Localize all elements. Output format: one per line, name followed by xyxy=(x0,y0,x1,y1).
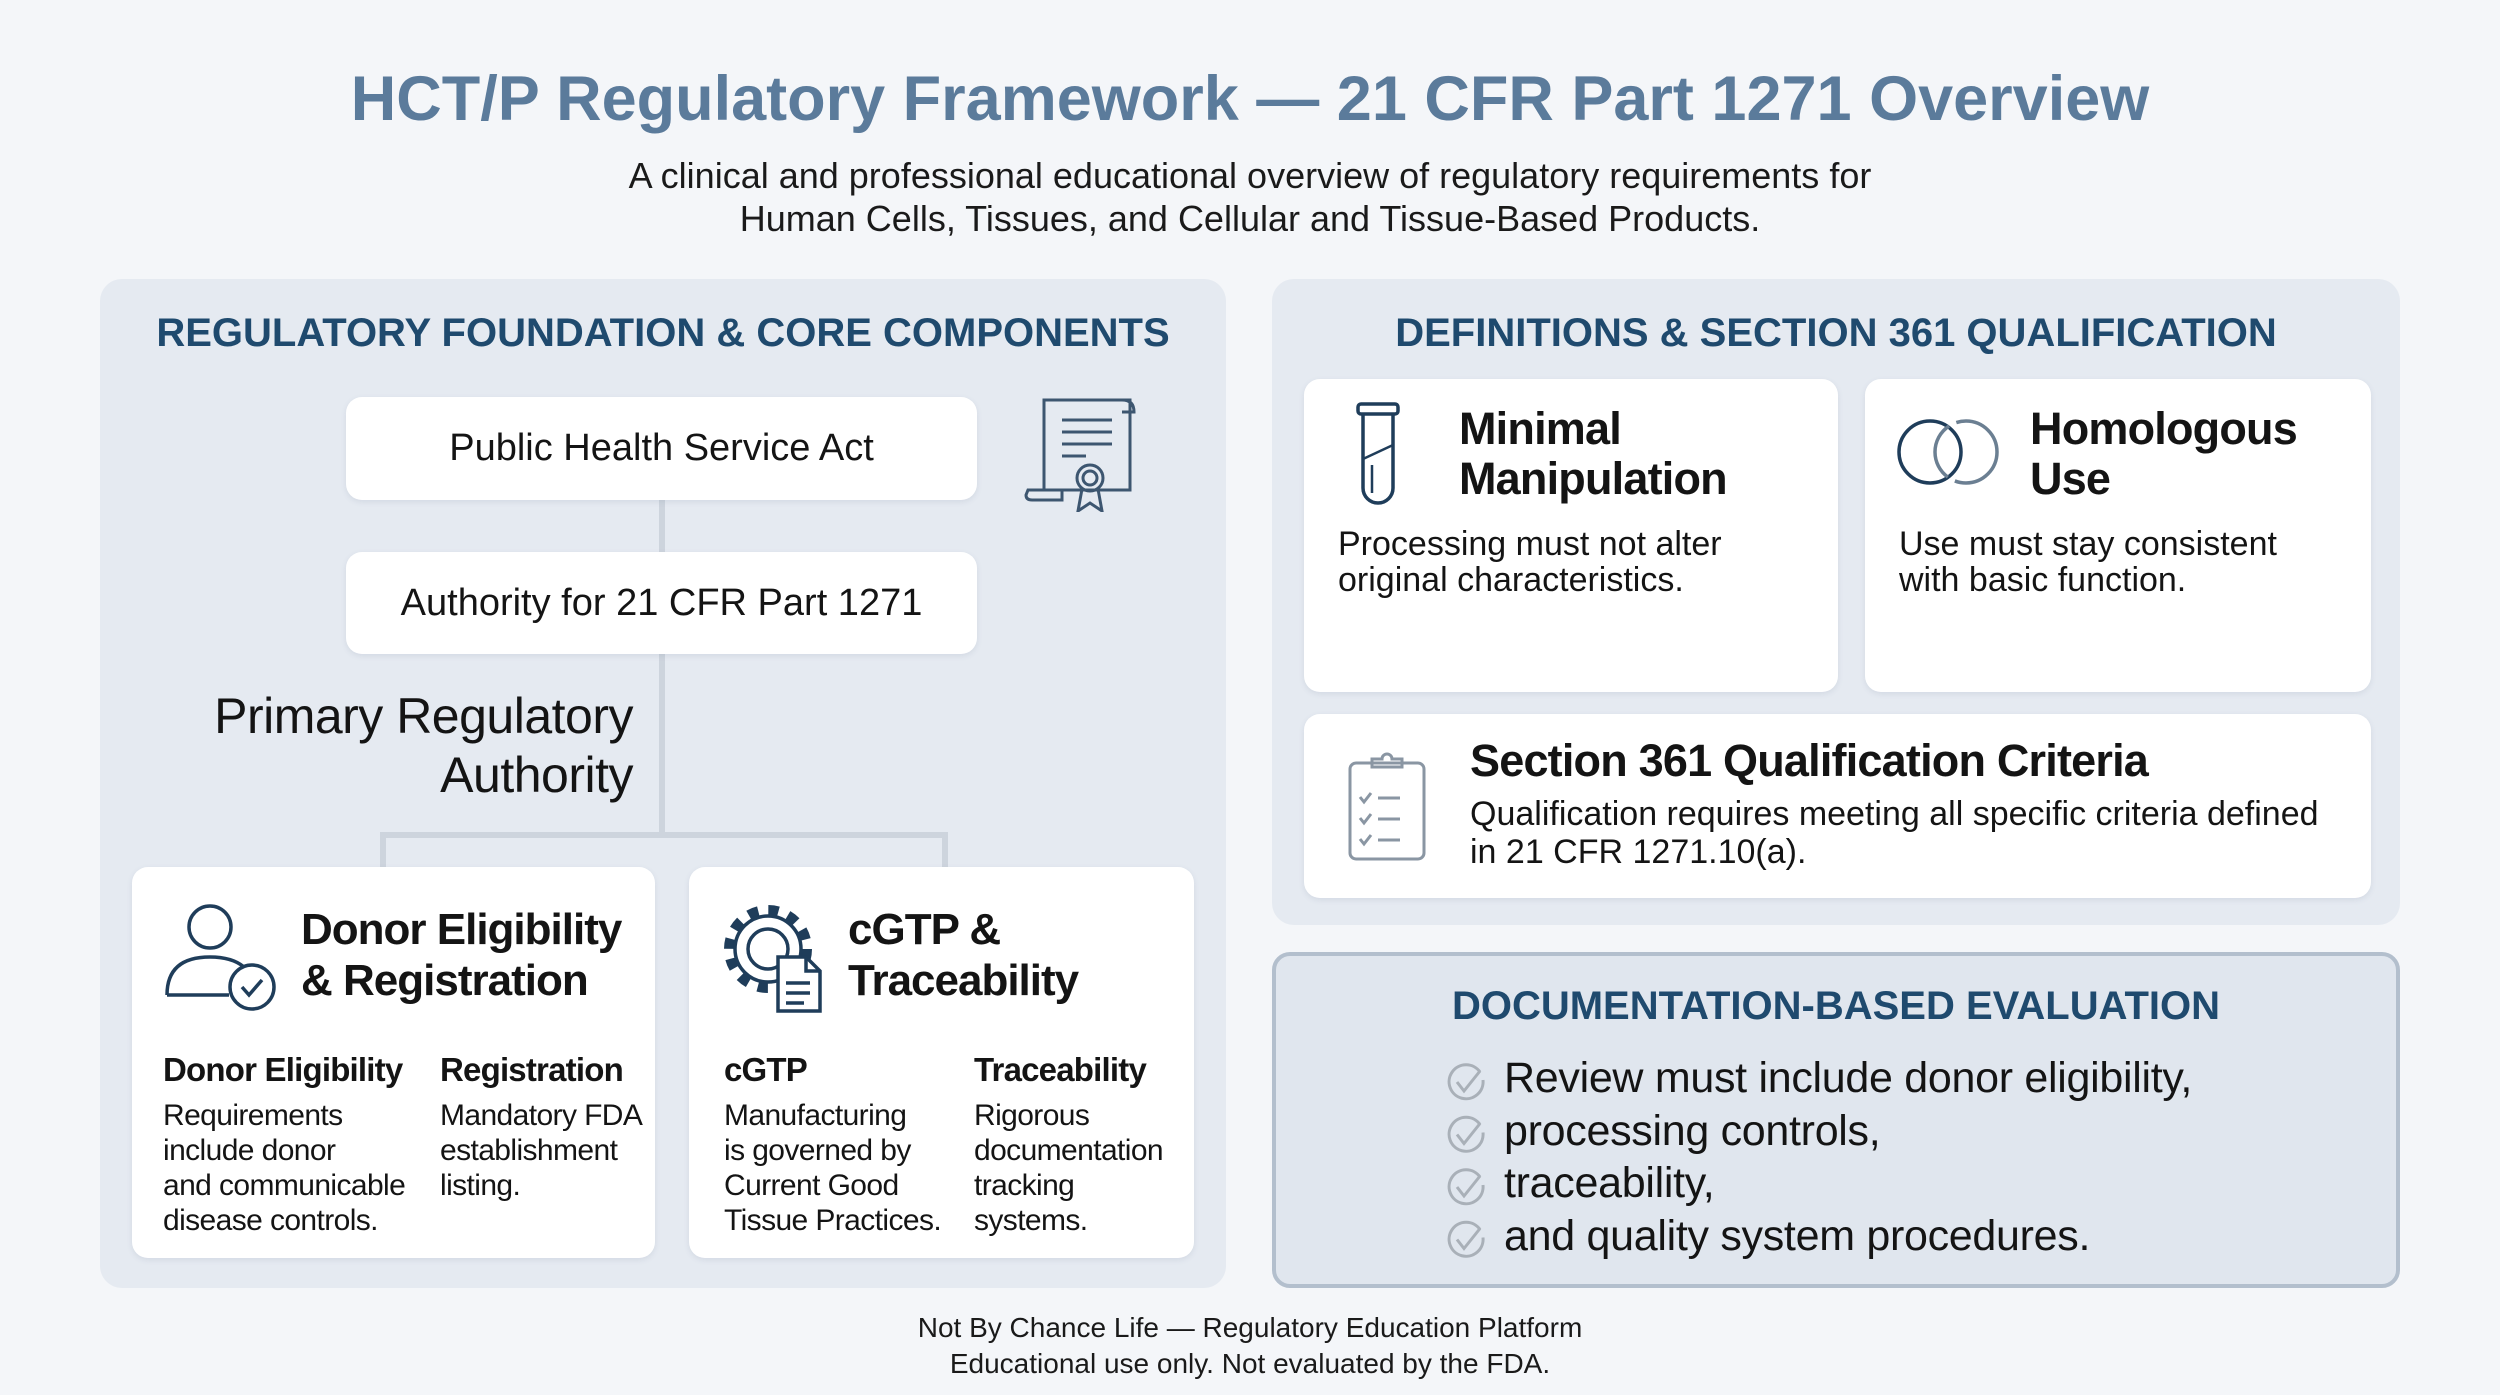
col: cGTP xyxy=(724,1051,941,1237)
icon: person with check xyxy=(165,904,276,1011)
text xyxy=(1470,795,2319,871)
heading: definitions: DEFINITIONS & SECTION 361 QUALIFICATION xyxy=(1395,311,2277,355)
subtitle: A clinical and professional educational overview of regulatory requirements for xyxy=(629,155,1871,196)
checklist xyxy=(1448,1054,2192,1260)
checklist: processing controls, xyxy=(1504,1106,1880,1154)
footer xyxy=(918,1312,1582,1379)
col: cGTP: is governed by xyxy=(724,1134,911,1167)
box: authority xyxy=(346,552,977,654)
col: cGTP: Tissue Practices. xyxy=(724,1204,941,1237)
col: registration: establishment xyxy=(440,1134,617,1167)
checklist: Review must include donor eligibility, xyxy=(1504,1054,2192,1102)
footer: Not By Chance Life — Regulatory Education Platform xyxy=(918,1312,1582,1343)
card: donor eligibility & registration xyxy=(132,867,655,1258)
title: HCT/P Regulatory Framework — 21 CFR Part 1271 Overview xyxy=(351,64,2149,134)
col: registration: Registration xyxy=(440,1051,623,1088)
title: Manipulation xyxy=(1459,453,1727,504)
col: cGTP: cGTP xyxy=(724,1051,807,1088)
card title: Traceability xyxy=(848,956,1078,1005)
text: Use must stay consistent xyxy=(1899,525,2277,563)
col: donor eligibility: include donor xyxy=(163,1134,335,1167)
title xyxy=(1459,403,1727,504)
title: Section 361 Qualification Criteria xyxy=(1470,735,2148,786)
col: traceability: tracking xyxy=(974,1169,1074,1202)
col: donor eligibility: Donor Eligibility xyxy=(163,1051,402,1088)
card title xyxy=(848,905,1079,1005)
col: donor eligibility: Requirements xyxy=(163,1099,343,1132)
title xyxy=(2030,403,2297,504)
box: public health service act xyxy=(346,397,977,500)
icon: interlocking rings xyxy=(1897,419,1999,485)
panel: documentation-based evaluation xyxy=(1272,952,2400,1288)
text: Qualification requires meeting all specific criteria defined xyxy=(1470,795,2319,833)
col: cGTP: Current Good xyxy=(724,1169,899,1202)
col: registration: Mandatory FDA xyxy=(440,1099,642,1132)
icon: scroll certificate xyxy=(1024,398,1136,512)
subtitle xyxy=(628,155,1871,239)
footer: Educational use only. Not evaluated by the FDA. xyxy=(950,1348,1550,1379)
checklist: traceability, xyxy=(1504,1159,1714,1207)
card title: Donor Eligibility xyxy=(301,905,621,954)
col: traceability: documentation xyxy=(974,1134,1163,1167)
card: section 361 criteria xyxy=(1304,714,2371,898)
card title xyxy=(301,905,622,1005)
panel: regulatory foundation xyxy=(100,279,1226,1288)
icon: test tube xyxy=(1356,402,1400,505)
col: donor eligibility: and communicable xyxy=(163,1169,405,1202)
checklist: and quality system procedures. xyxy=(1504,1212,2090,1260)
label: primary regulatory authority xyxy=(214,688,634,803)
text xyxy=(1338,525,1722,599)
connector lines xyxy=(380,500,948,867)
icon: gear with document xyxy=(724,905,822,1013)
text: Processing must not alter xyxy=(1338,525,1722,563)
col: registration xyxy=(440,1051,643,1202)
text: with basic function. xyxy=(1899,561,2186,599)
title: Use xyxy=(2030,453,2110,504)
col: traceability xyxy=(974,1051,1163,1237)
col: traceability: Traceability xyxy=(974,1051,1146,1088)
heading: DOCUMENTATION-BASED EVALUATION xyxy=(1452,984,2220,1028)
card title: cGTP & xyxy=(848,905,1000,954)
box: authority: Authority for 21 CFR Part 1271 xyxy=(401,582,922,624)
card title: & Registration xyxy=(301,956,588,1005)
col: registration: listing. xyxy=(440,1169,520,1202)
text: in 21 CFR 1271.10(a). xyxy=(1470,833,1806,871)
panel: definitions xyxy=(1272,279,2400,925)
box: public health service act: Public Health Service Act xyxy=(449,427,874,469)
title: Minimal xyxy=(1459,403,1621,454)
col: donor eligibility xyxy=(163,1051,405,1237)
title: Homologous xyxy=(2030,403,2297,454)
card: homologous use xyxy=(1865,379,2371,692)
text: original characteristics. xyxy=(1338,561,1684,599)
subtitle: Human Cells, Tissues, and Cellular and Tissue-Based Products. xyxy=(740,198,1760,239)
label: primary regulatory authority: Authority xyxy=(440,747,633,803)
card: cGTP & traceability xyxy=(689,867,1194,1258)
icon: clipboard checklist xyxy=(1348,752,1426,860)
card: minimal manipulation xyxy=(1304,379,1838,692)
col: traceability: Rigorous xyxy=(974,1099,1089,1132)
col: traceability: systems. xyxy=(974,1204,1088,1237)
label: primary regulatory authority: Primary Regulatory xyxy=(214,688,633,744)
col: cGTP: Manufacturing xyxy=(724,1099,906,1132)
text xyxy=(1899,525,2277,599)
col: donor eligibility: disease controls. xyxy=(163,1204,378,1237)
heading: regulatory foundation: REGULATORY FOUNDATION & CORE COMPONENTS xyxy=(156,311,1170,355)
